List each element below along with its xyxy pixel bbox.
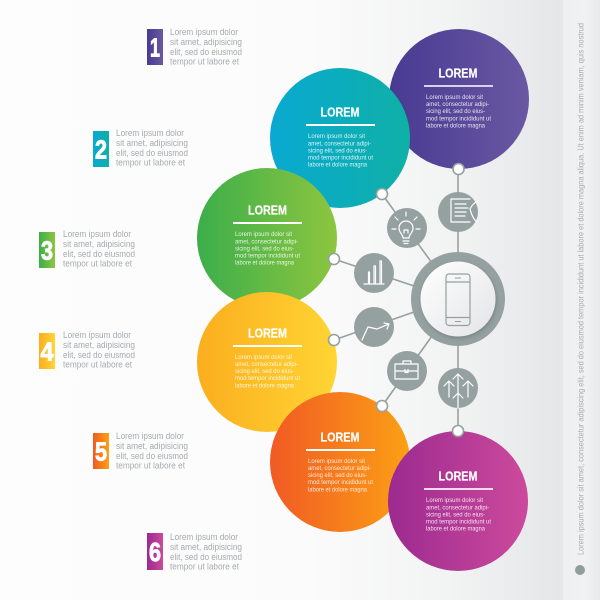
sidebar panel xyxy=(563,0,600,600)
body text: Lorem ipsum dolor sit xyxy=(235,354,292,361)
body text: Lorem ipsum dolor sit xyxy=(308,458,365,465)
heading: LOREM xyxy=(320,429,360,444)
item 3 xyxy=(39,229,135,269)
circle panel: green xyxy=(197,168,337,308)
body text xyxy=(308,133,373,169)
item 5 xyxy=(93,431,188,471)
label 3 xyxy=(63,229,135,269)
body text: labore et dolore magna xyxy=(235,382,294,389)
body text: mod tempor incididunt ut xyxy=(308,154,373,162)
label 6: sit amet, adipisicing xyxy=(170,542,242,552)
circle panel: orange xyxy=(270,392,410,532)
body text xyxy=(235,231,300,267)
body text xyxy=(426,497,491,533)
heading: LOREM xyxy=(248,203,287,218)
label 1 xyxy=(170,27,242,67)
label 1: tempor ut labore et xyxy=(170,57,240,67)
body text: Lorem ipsum dolor sit xyxy=(426,497,483,504)
badge 6: 6 xyxy=(149,537,161,567)
body text: sicing elit, sed do eius- xyxy=(426,108,485,115)
label 2 xyxy=(116,128,188,168)
label 3: sit amet, adipisicing xyxy=(63,239,135,249)
body text: amet, consectetur adipi- xyxy=(308,140,371,147)
label 1: Lorem ipsum dolor xyxy=(170,27,238,37)
hub: phone xyxy=(411,252,505,346)
body text: labore et dolore magna xyxy=(426,122,485,129)
icon: briefcase xyxy=(387,351,427,391)
label 3: Lorem ipsum dolor xyxy=(63,229,131,239)
label 6: Lorem ipsum dolor xyxy=(170,532,238,542)
body text: labore et dolore magna xyxy=(308,162,367,169)
body text: sicing elit, sed do eius- xyxy=(235,368,294,375)
label 3: tempor ut labore et xyxy=(63,259,133,269)
body text: amet, consectetur adipi- xyxy=(426,504,489,511)
label 3: elit, sed do eiusmod xyxy=(63,249,135,259)
icon: document xyxy=(438,192,478,232)
body text: amet, consectetur adipi- xyxy=(235,361,298,368)
label 6: tempor ut labore et xyxy=(170,562,240,572)
label 5: Lorem ipsum dolor xyxy=(116,431,184,441)
label 6: elit, sed do eiusmod xyxy=(170,552,242,562)
label 4: Lorem ipsum dolor xyxy=(63,330,131,340)
item 1 xyxy=(147,27,242,67)
label 4: elit, sed do eiusmod xyxy=(63,350,135,360)
body text: labore et dolore magna xyxy=(235,260,294,267)
body text: mod tempor incididunt ut xyxy=(235,375,300,382)
body text: mod tempor incididunt ut xyxy=(426,115,491,122)
label 6 xyxy=(170,532,242,572)
icon: smartphone xyxy=(446,274,470,326)
label 4: tempor ut labore et xyxy=(63,360,133,370)
item 6 xyxy=(147,532,242,572)
icon: arrows xyxy=(438,368,478,408)
body text: mod tempor incididunt ut xyxy=(426,518,491,526)
heading: LOREM xyxy=(320,105,360,120)
circle panel: teal xyxy=(270,68,410,208)
badge 4: 4 xyxy=(40,336,54,366)
body text: amet, consectetur adipi- xyxy=(235,238,298,245)
label 1: elit, sed do eiusmod xyxy=(170,47,242,57)
label 5: sit amet, adipisicing xyxy=(116,441,188,451)
badge 3: 3 xyxy=(41,236,53,266)
body text: sicing elit, sed do eius- xyxy=(426,511,485,518)
label 4: sit amet, adipisicing xyxy=(63,340,135,350)
heading: LOREM xyxy=(438,66,478,81)
badge 5: 5 xyxy=(95,436,107,466)
icon: trend arrow xyxy=(354,307,394,347)
label 4 xyxy=(63,330,135,370)
label 2: tempor ut labore et xyxy=(116,158,186,168)
body text: sicing elit, sed do eius- xyxy=(308,472,367,479)
body text: Lorem ipsum dolor sit xyxy=(235,231,292,238)
body text: mod tempor incididunt ut xyxy=(308,479,373,486)
label 2: Lorem ipsum dolor xyxy=(116,128,184,138)
icon: bar chart xyxy=(354,253,394,293)
body text xyxy=(426,94,491,129)
label 5 xyxy=(116,431,188,471)
badge 1: 1 xyxy=(150,32,160,62)
body text xyxy=(308,458,373,493)
item 2 xyxy=(93,128,188,168)
label 1: sit amet, adipisicing xyxy=(170,37,242,47)
label 5: elit, sed do eiusmod xyxy=(116,451,188,461)
body text: sicing elit, sed do eius- xyxy=(235,245,294,252)
circle panel: yellow xyxy=(197,292,337,432)
body text: amet, consectetur adipi- xyxy=(426,101,489,108)
body text: labore et dolore magna xyxy=(308,486,367,493)
body text: sicing elit, sed do eius- xyxy=(308,147,367,154)
icon: light bulb xyxy=(387,208,427,248)
body text: mod tempor incididunt ut xyxy=(235,252,300,260)
circle panel: purple xyxy=(389,29,529,169)
connectors xyxy=(328,164,464,436)
body text xyxy=(235,354,300,389)
sidebar dot xyxy=(575,565,585,575)
label 5: tempor ut labore et xyxy=(116,461,186,471)
heading: LOREM xyxy=(248,325,287,340)
body text: amet, consectetur adipi- xyxy=(308,465,371,472)
label 2: sit amet, adipisicing xyxy=(116,138,188,148)
circle panel: magenta xyxy=(388,431,528,571)
body text: Lorem ipsum dolor sit xyxy=(426,94,483,101)
item 4 xyxy=(39,330,135,370)
heading: LOREM xyxy=(438,469,478,484)
body text: labore et dolore magna xyxy=(426,526,485,533)
body text: Lorem ipsum dolor sit xyxy=(308,133,365,140)
badge 2: 2 xyxy=(95,134,107,164)
label 2: elit, sed do eiusmod xyxy=(116,148,188,158)
